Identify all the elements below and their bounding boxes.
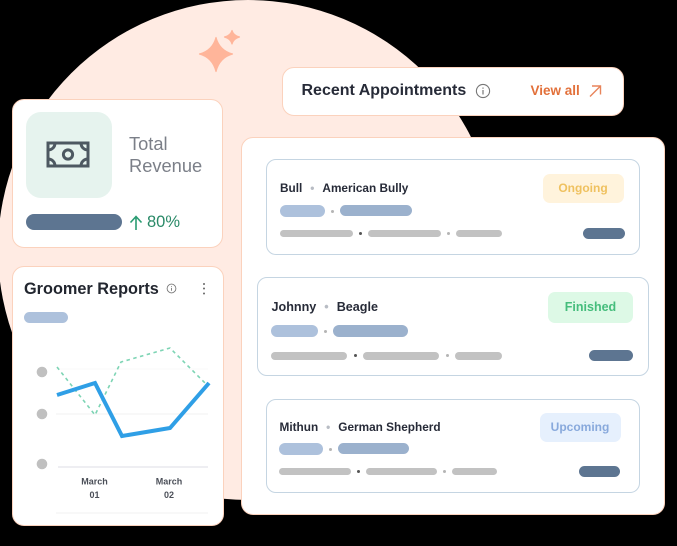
placeholder bars (279, 443, 620, 477)
icon: banknote (46, 142, 90, 168)
icon: info (476, 84, 490, 98)
line chart: 02 (163, 490, 174, 500)
link: view all: View all (530, 83, 580, 98)
line chart: 01 (89, 490, 99, 500)
background circle (0, 0, 498, 500)
stat: 80%: 80% (147, 213, 180, 231)
placeholder bars (271, 325, 633, 361)
icon: external arrow (590, 85, 602, 97)
icon: up arrow (130, 216, 142, 230)
status: upcoming: Upcoming (551, 420, 609, 434)
panel: recent appointments header (282, 67, 624, 116)
appointment row: Johnny (256, 277, 648, 376)
appointment row: Mithun (266, 399, 640, 493)
status: ongoing: Ongoing (558, 180, 608, 194)
legend pill (24, 312, 68, 323)
icon: menu dots (203, 283, 205, 294)
heading: Groomer Reports (24, 280, 159, 298)
panel: total revenue (12, 99, 223, 248)
line chart: March (81, 476, 107, 486)
line chart: March (155, 476, 182, 486)
progress bar (26, 214, 122, 230)
label: total revenue: Total Revenue (129, 133, 202, 176)
icon tile: money (26, 112, 112, 198)
line chart (36, 347, 210, 514)
heading: Recent Appointments (302, 82, 466, 99)
placeholder bars (280, 205, 625, 239)
appointment row: Bull (266, 159, 640, 255)
pet name and breed: Johnny • Beagle (272, 300, 378, 314)
status: upcoming (540, 412, 620, 442)
panel: appointments list (241, 137, 665, 515)
pet name and breed: Bull • American Bully (280, 181, 408, 195)
status: ongoing (542, 174, 624, 202)
icon: sparkle (199, 30, 240, 72)
icon: info (166, 284, 176, 294)
pet name and breed: Mithun • German Shepherd (280, 420, 441, 434)
status: finished: Finished (565, 300, 616, 314)
panel: groomer reports (12, 266, 224, 526)
status: finished (548, 292, 633, 322)
